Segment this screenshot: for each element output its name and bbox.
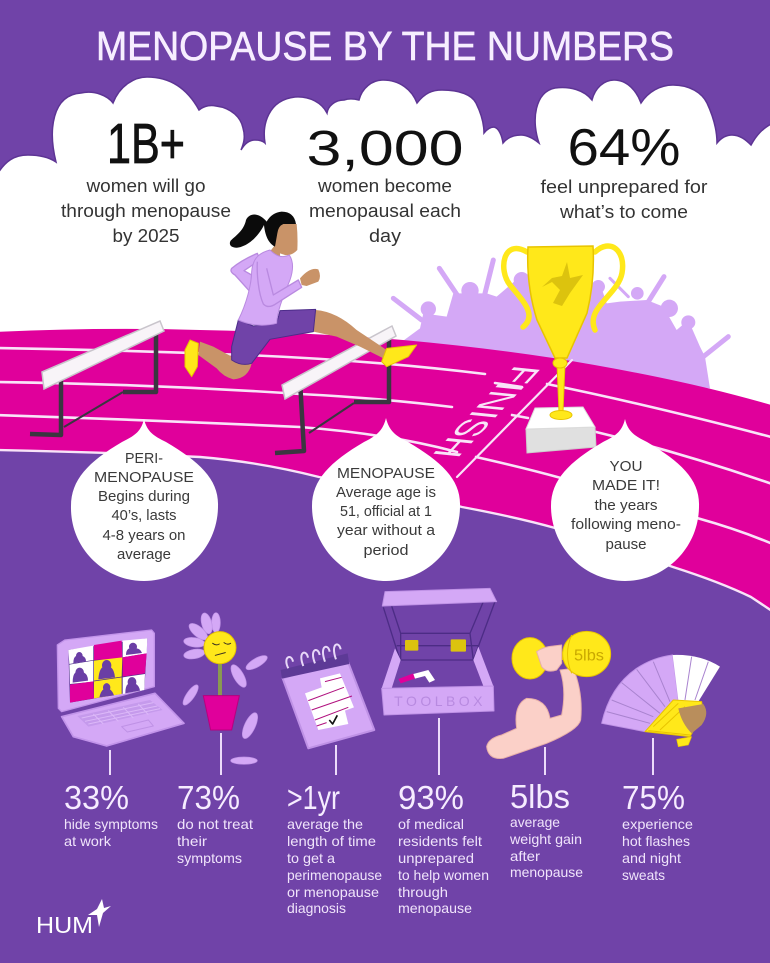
stat: 75%: 75% (622, 779, 685, 816)
front arm (257, 262, 302, 306)
stat: 75%: and night (622, 850, 681, 866)
bubble: perimenopause: Begins during (98, 488, 190, 505)
stat: 75%: hot flashes (622, 833, 690, 849)
hummingbird mark (542, 262, 583, 306)
stat: >1yr: >1yr (287, 779, 340, 816)
stat: 93%: unprepared (398, 850, 474, 866)
bubble: perimenopause (71, 419, 218, 581)
stat: >1yr: or menopause (287, 884, 379, 900)
stat: 75%: sweats (622, 867, 665, 883)
stat: 93%: menopause (398, 900, 472, 916)
stat: 33%: at work (64, 833, 112, 849)
logo: HUM (36, 899, 111, 938)
front leg (313, 310, 390, 360)
bubble: perimenopause: MENOPAUSE (94, 469, 194, 486)
hand (300, 269, 320, 286)
bubble: perimenopause: PERI- (125, 450, 163, 467)
back leg (198, 342, 252, 379)
runner (185, 212, 417, 379)
calendar stem (335, 745, 337, 775)
bubble: you made it (551, 419, 699, 581)
bubble: you made it: YOU (610, 458, 642, 475)
stat: >1yr: perimenopause (287, 867, 382, 883)
bubble: you made it: the years (594, 497, 658, 514)
stat: 75%: experience (622, 816, 693, 832)
shorts (232, 309, 316, 364)
cloud background (0, 77, 770, 520)
stat: 1B+: through menopause (61, 201, 231, 221)
stat: 33%: 33% (64, 779, 129, 816)
stat: 33%: hide symptoms (64, 816, 158, 832)
bubble: menopause: MENOPAUSE (337, 465, 435, 482)
stat: 93%: of medical (398, 816, 464, 832)
icon: toolbox: TOOLBOX (394, 693, 483, 709)
stat: 93%: to help women (398, 867, 489, 883)
bubble: perimenopause: 4-8 years on (102, 527, 186, 544)
stat: 5lbs: 5lbs (510, 778, 570, 815)
flower stem (220, 733, 222, 775)
stat: 75% (622, 779, 693, 883)
trophy (504, 246, 623, 420)
stat: 73%: do not treat (177, 816, 253, 832)
stat: 1B+ (61, 112, 231, 246)
stat: 5lbs: weight gain (509, 831, 582, 847)
icon: wilting flower (180, 612, 269, 764)
icon: laptop (57, 630, 184, 746)
stat: 93%: 93% (398, 779, 464, 816)
back arm (231, 253, 260, 292)
stat: 1B+: 1B+ (107, 112, 185, 176)
finish lettering: FINISH (422, 364, 549, 459)
stat: >1yr: diagnosis (287, 900, 346, 916)
icon: hand fan (602, 655, 720, 747)
stat: 73%: symptoms (177, 850, 242, 866)
stat: 33% (64, 779, 158, 849)
stat: 64%: 64% (568, 119, 680, 177)
splash behind trophy (393, 260, 728, 388)
stat: 3,000: women become (317, 176, 452, 196)
stat: 5lbs: average (510, 814, 560, 830)
hurdle 1 (30, 321, 164, 435)
stat: >1yr: length of time (287, 833, 376, 849)
stat: 93% (398, 779, 489, 916)
ponytail and hair (230, 212, 296, 248)
lane lines (0, 348, 770, 545)
fan stem (652, 738, 654, 775)
bubble: menopause: period (364, 542, 408, 559)
laptop stem (109, 750, 111, 775)
purple lower field (0, 450, 770, 963)
stat: 1B+: by 2025 (112, 226, 180, 246)
stat: 1B+: women will go (85, 176, 206, 196)
bubble: perimenopause: 40’s, lasts (112, 507, 176, 524)
stat: >1yr: to get a (287, 850, 335, 866)
stat: 3,000: 3,000 (306, 122, 464, 176)
stat: 3,000: day (369, 226, 401, 246)
stat: 73%: 73% (177, 779, 240, 816)
bubble: menopause: Average age is (336, 484, 436, 501)
stat: 3,000: menopausal each (309, 201, 461, 221)
bubble: menopause (312, 418, 460, 581)
bubble: you made it: MADE IT! (592, 477, 660, 494)
icon: toolbox (382, 588, 497, 715)
logo: HUM: HUM (36, 912, 93, 938)
bubble: you made it: pause (606, 536, 646, 553)
stat: 5lbs: menopause (510, 864, 583, 880)
stat: 5lbs (509, 778, 583, 880)
stat: 93%: through (398, 884, 448, 900)
bubble: menopause: 51, official at 1 (340, 503, 432, 520)
toolbox stem (438, 718, 440, 775)
stat: >1yr (287, 779, 382, 916)
bubble: menopause: year without a (337, 522, 436, 539)
shoes (185, 340, 417, 377)
stat: >1yr: average the (287, 816, 363, 832)
stat: 64%: what’s to come (559, 202, 688, 222)
bubble: perimenopause: average (117, 546, 171, 563)
icon: calendar (281, 644, 374, 748)
plinth (526, 407, 596, 453)
stat: 73% (177, 779, 253, 866)
stat: 3,000 (306, 122, 464, 246)
stat: 5lbs: after (510, 848, 540, 864)
stat: 93%: residents felt (398, 833, 482, 849)
stat: 73%: their (177, 833, 207, 849)
torso (238, 250, 292, 325)
stat: 64%: feel unprepared for (540, 177, 708, 197)
icon: arm and dumbbell: 5lbs (574, 648, 604, 665)
icon: arm and dumbbell (487, 631, 611, 759)
hurdle 2 (275, 326, 396, 453)
title: MENOPAUSE BY THE NUMBERS (96, 23, 674, 69)
face (271, 224, 298, 259)
stat: 64% (540, 119, 708, 222)
running track (0, 329, 770, 620)
bubble: you made it: following meno- (571, 516, 681, 533)
arm stem (544, 747, 546, 775)
